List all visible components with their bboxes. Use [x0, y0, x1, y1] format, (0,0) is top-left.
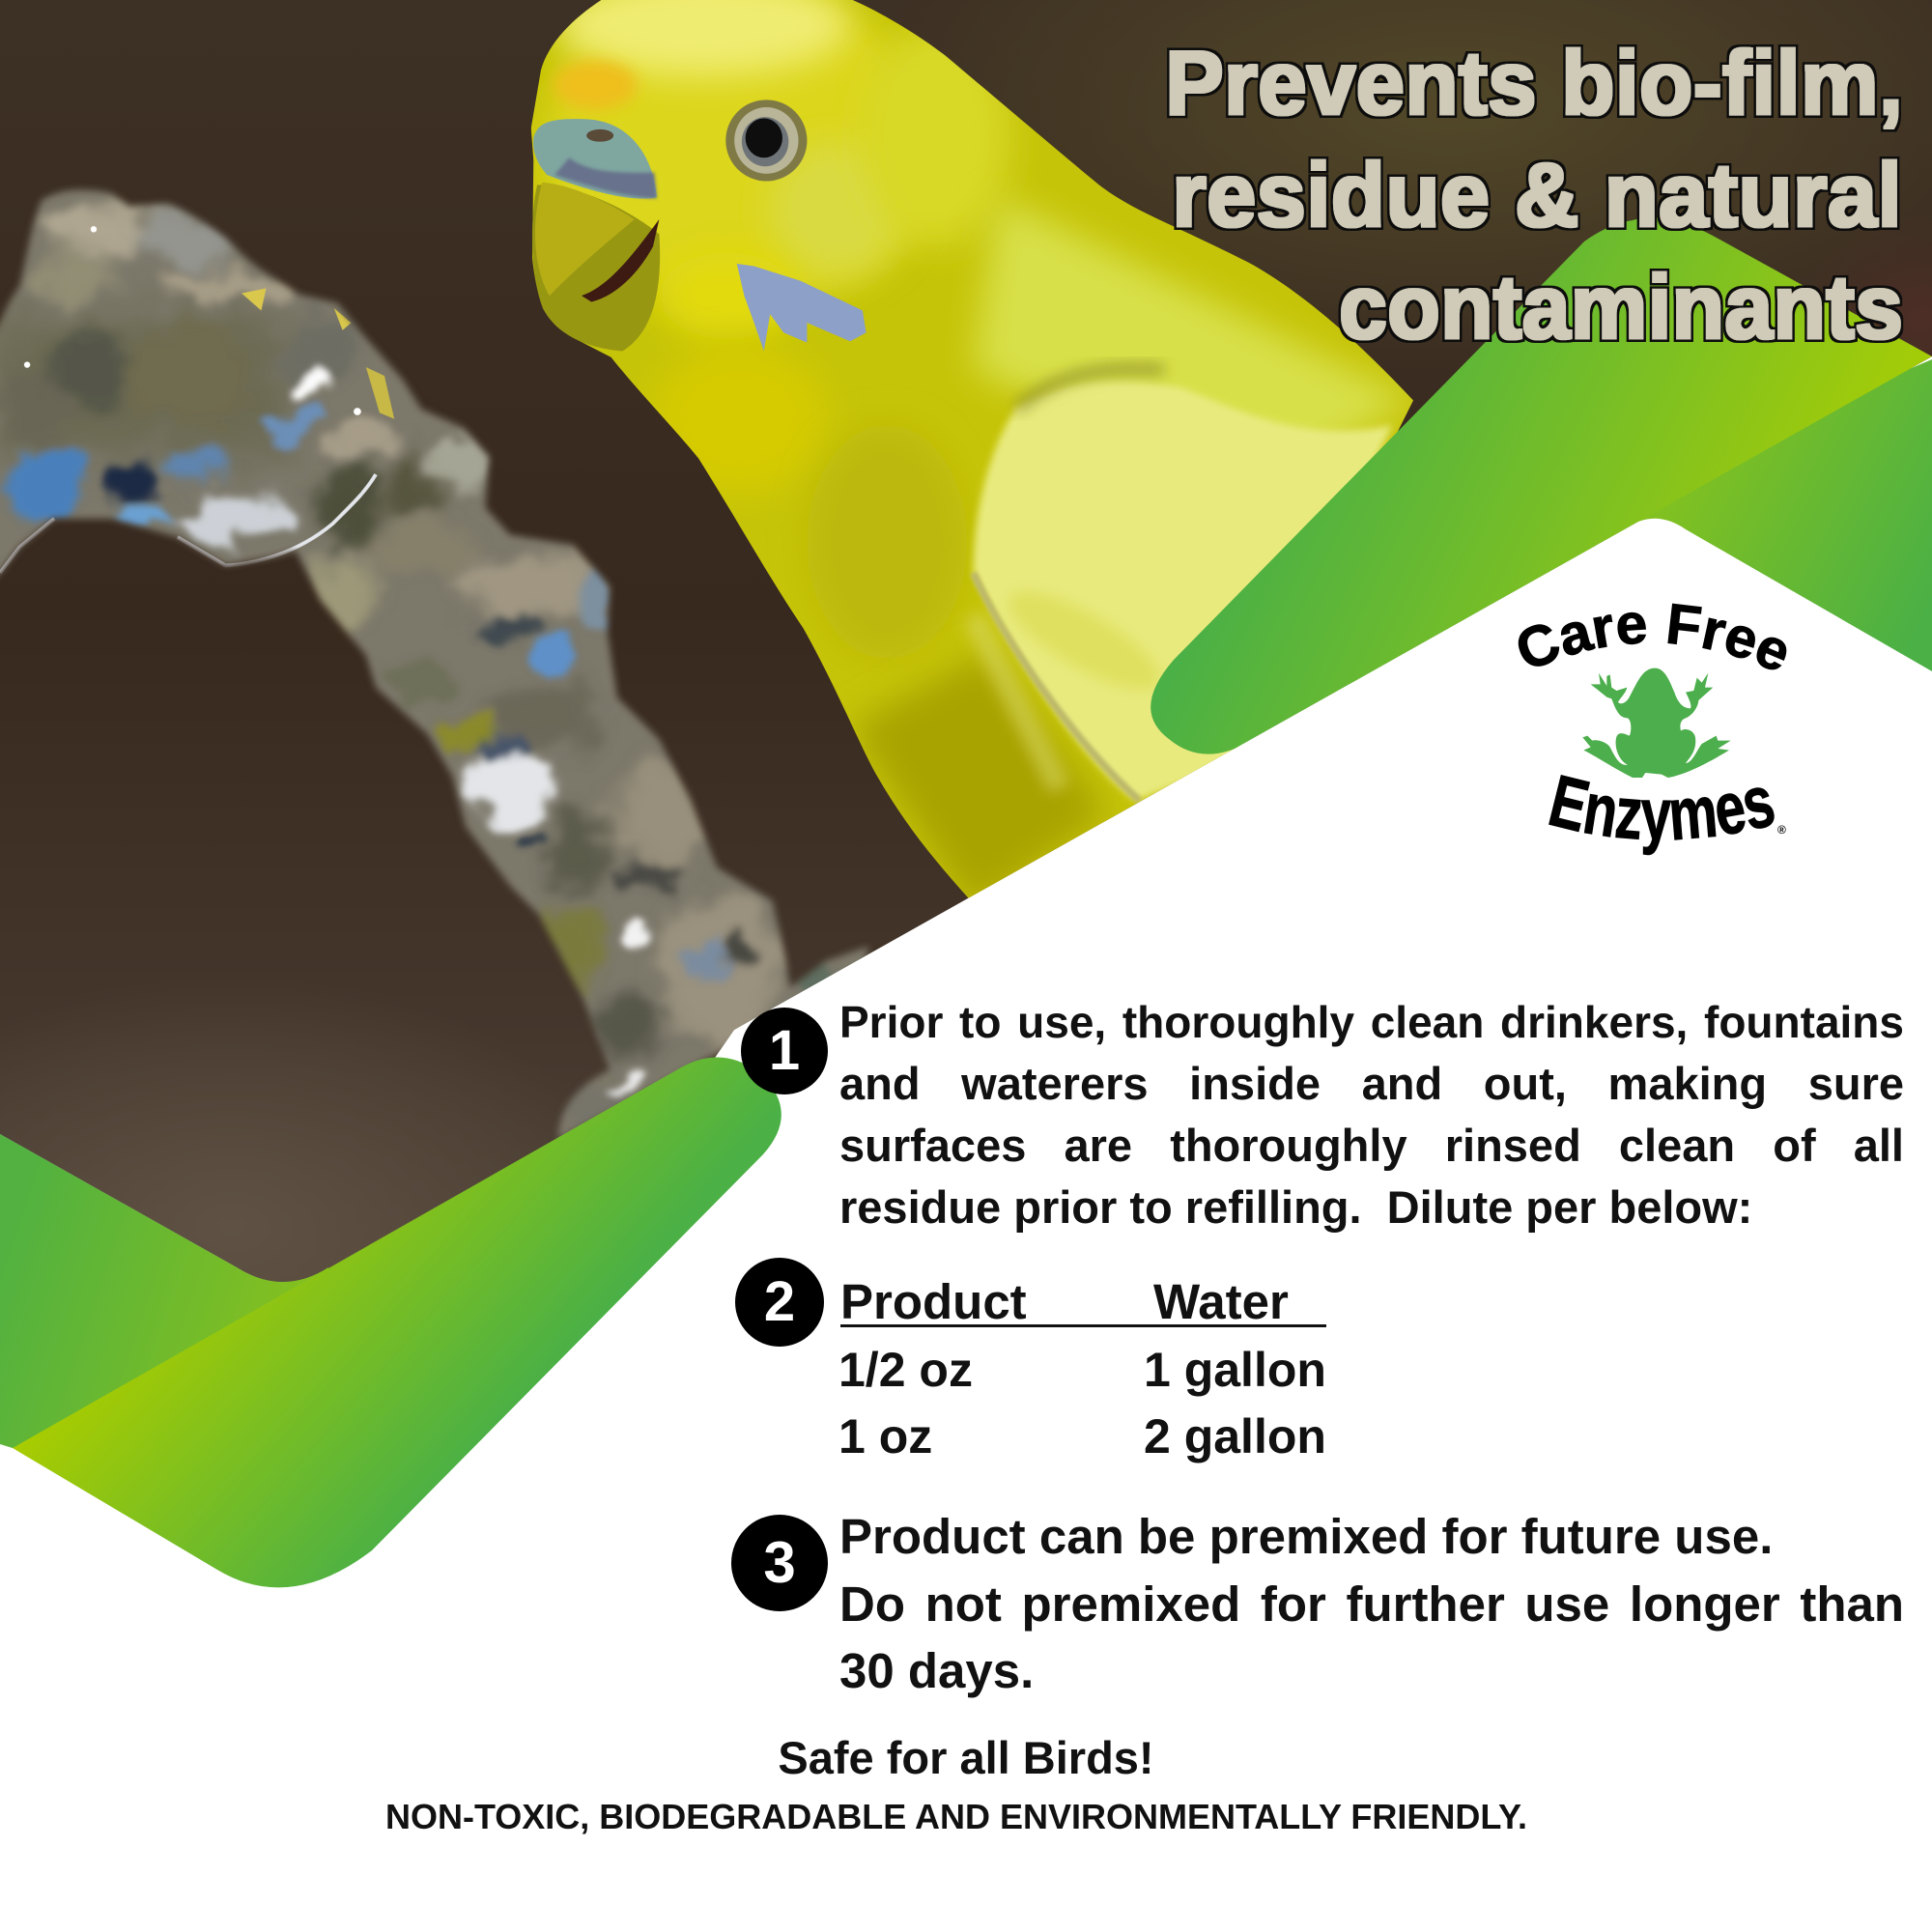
- step 1 badge: 1: [769, 1019, 800, 1082]
- step 3 text: [839, 1509, 1904, 1698]
- step 3 text: Do not premixed for further use longer than: [839, 1577, 1904, 1632]
- headline: contaminants: [1339, 256, 1903, 357]
- dilution table: Water: [1153, 1274, 1289, 1329]
- icon: frog: [1582, 668, 1731, 778]
- headline: Prevents bio-film,: [1165, 32, 1903, 133]
- logo text: Care Free: Care Free: [1519, 603, 1787, 670]
- step 1 text: [839, 997, 1904, 1233]
- beak: [532, 119, 660, 352]
- headline: residue & natural: [1172, 144, 1902, 245]
- dilution table: 1/2 oz: [838, 1343, 973, 1397]
- green shape: top gradient band: [1151, 217, 1932, 754]
- logo: Care Free Enzymes: [1519, 603, 1787, 856]
- step 3 text: Product can be premixed for future use.: [839, 1509, 1773, 1564]
- step 1 text: Prior to use, thoroughly clean drinkers, fountains: [839, 997, 1904, 1047]
- cheek spots: [737, 264, 867, 352]
- dilution table: 2 gallon: [1144, 1409, 1326, 1463]
- water arc: [0, 160, 912, 1171]
- dilution table: 1 oz: [838, 1409, 932, 1463]
- step 2 badge: [735, 1258, 824, 1347]
- footer claim: NON-TOXIC, BIODEGRADABLE AND ENVIRONMENTALLY FRIENDLY.: [385, 1797, 1527, 1836]
- step 1 text: and waterers inside and out, making sure: [839, 1058, 1904, 1109]
- eye: [725, 99, 807, 181]
- green shape: right band: [1623, 359, 1932, 671]
- step 2 badge: 2: [764, 1270, 795, 1333]
- registered mark: ®: [1777, 823, 1786, 837]
- step 1 badge: [741, 1008, 828, 1094]
- step 1 text: surfaces are thoroughly rinsed clean of all: [839, 1120, 1904, 1171]
- tagline: Safe for all Birds!: [778, 1732, 1154, 1783]
- green shape: left band: [0, 1134, 328, 1448]
- parakeet: [518, 0, 1430, 912]
- headline: [1165, 32, 1903, 357]
- photo: parakeet and water: [0, 0, 1932, 1282]
- dilution table: 1 gallon: [1144, 1343, 1326, 1397]
- logo text: Enzymes: Enzymes: [1548, 775, 1775, 856]
- dilution table: [838, 1274, 1326, 1463]
- step 3 badge: 3: [763, 1530, 796, 1595]
- step 1 text: residue prior to refilling. Dilute per below:: [839, 1181, 1752, 1233]
- step 3 badge: [731, 1515, 828, 1611]
- dilution table: Product: [840, 1274, 1027, 1329]
- green shape: lower gradient band: [13, 1057, 781, 1587]
- step 3 text: 30 days.: [839, 1643, 1034, 1698]
